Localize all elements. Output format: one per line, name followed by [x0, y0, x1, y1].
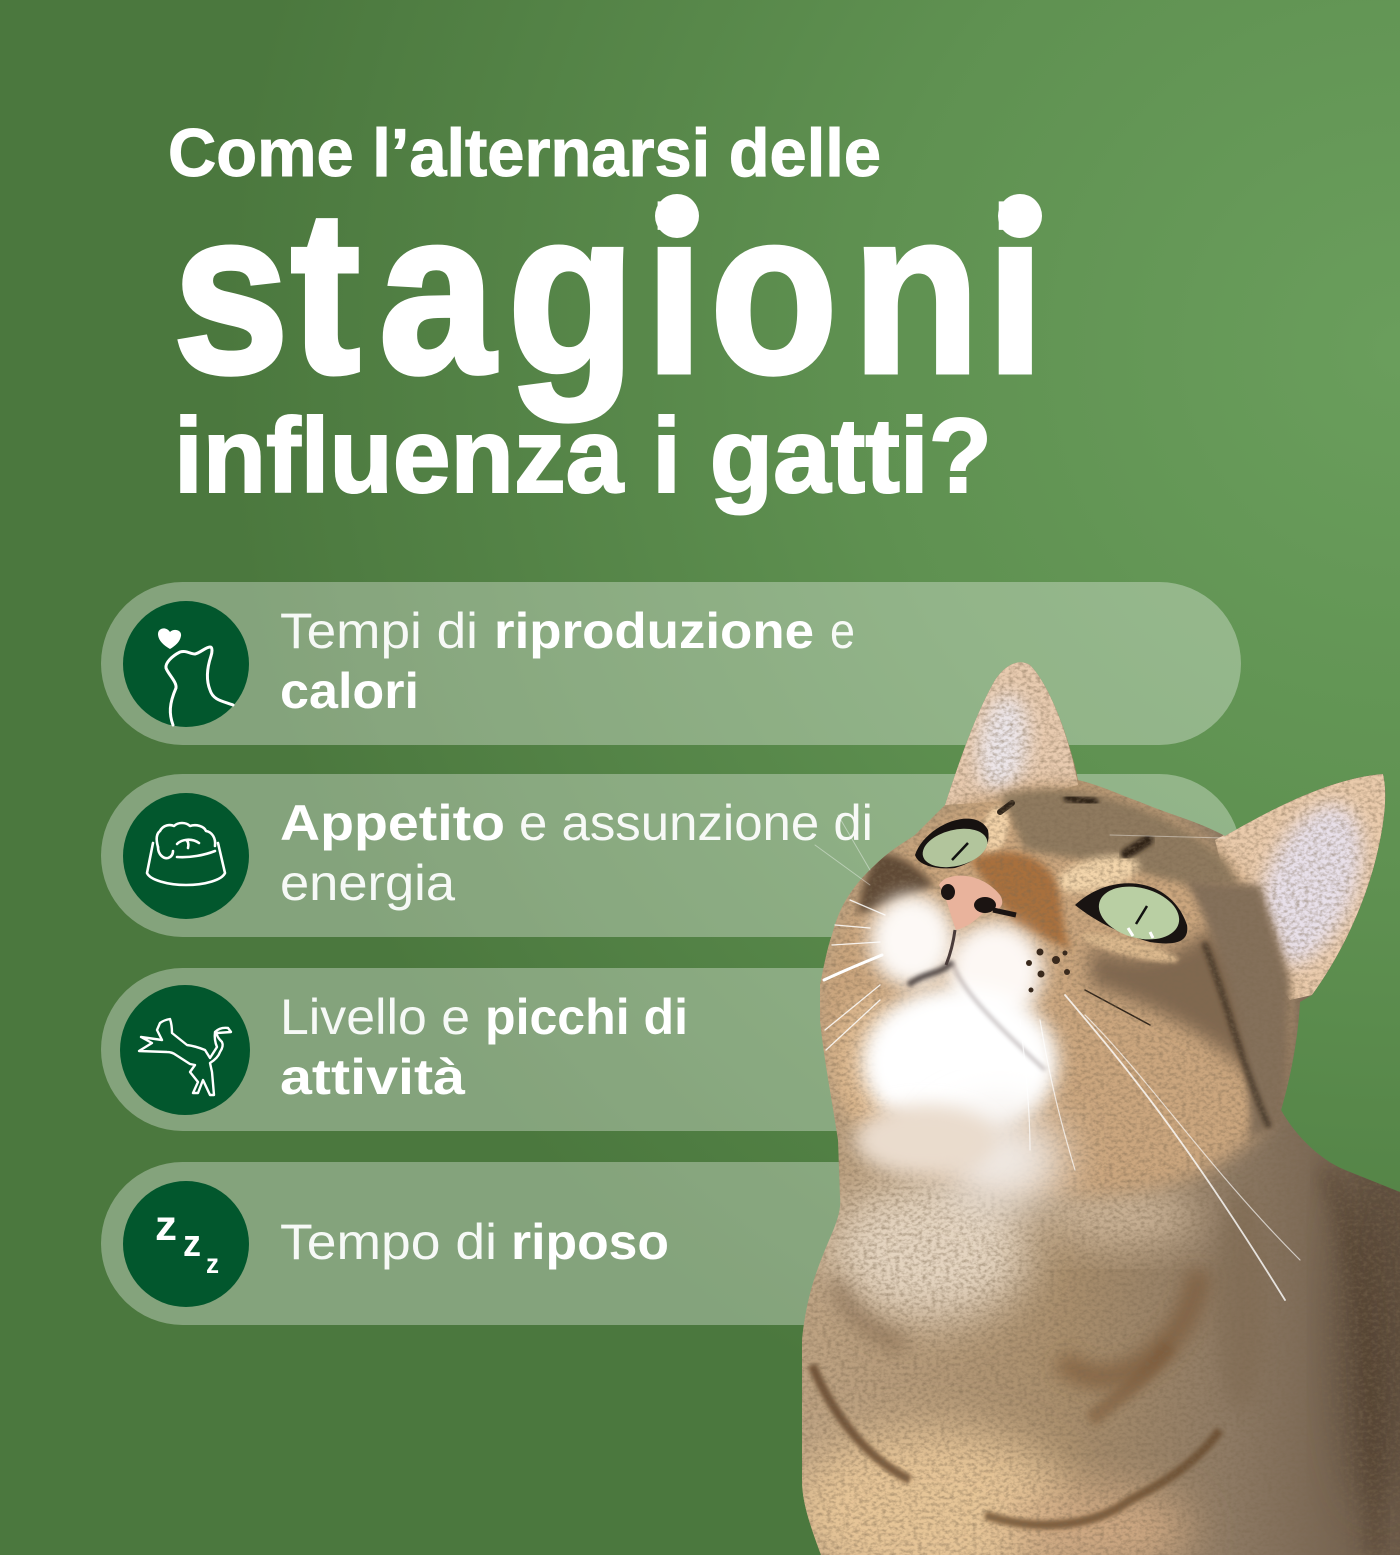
- illustration: tabby cat looking up: [790, 650, 1400, 1555]
- cat left eye: [915, 818, 989, 868]
- panel: appetito: [101, 774, 1241, 937]
- text: riproduzione: calori: [280, 663, 419, 719]
- panel: attivita: [101, 968, 1241, 1131]
- icon: zzz: z: [206, 1248, 219, 1279]
- cat right eye: [1075, 883, 1188, 944]
- text: riproduzione: [280, 603, 855, 719]
- text: attivita: attività: [280, 1049, 465, 1105]
- panel: riproduzione: [101, 582, 1241, 745]
- title: Come l’alternarsi delle: [168, 115, 881, 191]
- cat ears: [945, 662, 1385, 1000]
- text: appetito: e assunzione di: [519, 795, 873, 851]
- cat nose: [939, 876, 1016, 965]
- cat whiskers: [815, 815, 1300, 1300]
- text: riposo: riposo: [511, 1214, 669, 1270]
- icon: food bowl: [123, 793, 249, 919]
- icon: zzz: [123, 1181, 249, 1307]
- text: riposo: [280, 1214, 669, 1270]
- cat white muzzle and chin: [855, 894, 1062, 1210]
- cat whisker-spots: [1026, 948, 1070, 992]
- text: attivita: [280, 989, 688, 1105]
- text: riproduzione: riproduzione: [494, 603, 814, 659]
- cat body: [790, 650, 1400, 1555]
- fur texture: [790, 650, 1400, 1555]
- text: attivita: Livello e: [280, 989, 470, 1045]
- icon: zzz: z: [183, 1223, 201, 1265]
- text: riproduzione: Tempi di: [280, 603, 478, 659]
- icon: cat with heart: [123, 601, 249, 727]
- text: appetito: Appetito: [280, 795, 505, 851]
- icon: jumping cat: [120, 985, 250, 1115]
- cat head: [820, 784, 1290, 1195]
- text: riposo: Tempo di: [280, 1214, 497, 1270]
- icon: zzz: z: [155, 1202, 177, 1250]
- title: [168, 115, 1044, 515]
- text: appetito: [280, 795, 873, 911]
- title: stagioni: [173, 162, 1044, 421]
- text: appetito: energia: [280, 855, 455, 911]
- panel: riposo: [101, 1162, 1241, 1325]
- title: influenza i gatti?: [174, 397, 992, 515]
- text: attivita: picchi di: [485, 989, 688, 1045]
- text: riproduzione: e: [830, 603, 855, 659]
